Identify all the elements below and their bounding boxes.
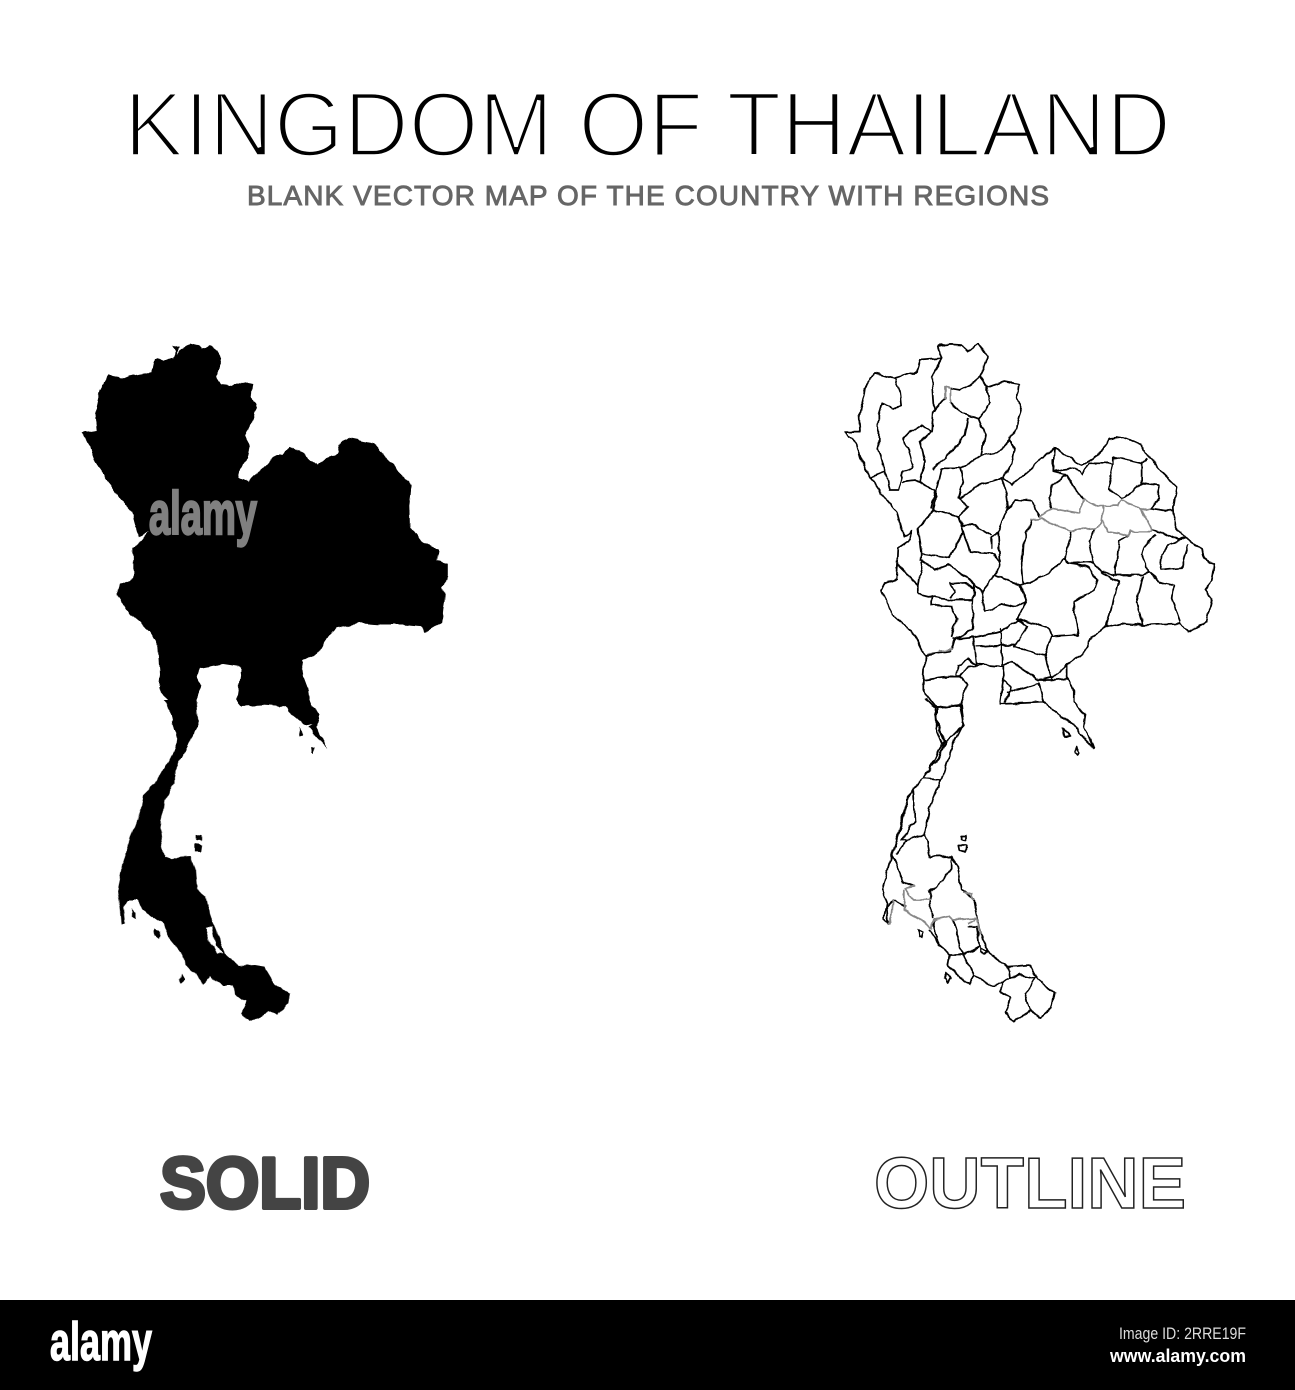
southern provinces outline bbox=[882, 700, 1055, 1022]
footer logo: alamy bbox=[50, 1312, 152, 1372]
gray southern borders bbox=[888, 887, 980, 933]
islands bbox=[1063, 728, 1079, 755]
label: outline: OUTLINE bbox=[874, 1144, 1186, 1224]
website: www.alamy.com bbox=[1109, 1346, 1246, 1366]
watermark: alamy bbox=[149, 480, 257, 547]
outline map of Thailand with regions bbox=[845, 343, 1214, 1022]
north and central provinces outline bbox=[845, 343, 1214, 765]
subtitle: BLANK VECTOR MAP OF THE COUNTRY WITH REGIONS bbox=[247, 180, 1049, 211]
solid map of Thailand bbox=[81, 343, 448, 1022]
gray province borders bbox=[940, 387, 1152, 652]
footer bar bbox=[0, 1300, 1295, 1390]
label: solid: SOLID bbox=[160, 1144, 370, 1224]
title: KINGDOM OF THAILAND bbox=[124, 74, 1171, 176]
image id: Image ID: 2RRE19F bbox=[1119, 1324, 1246, 1343]
